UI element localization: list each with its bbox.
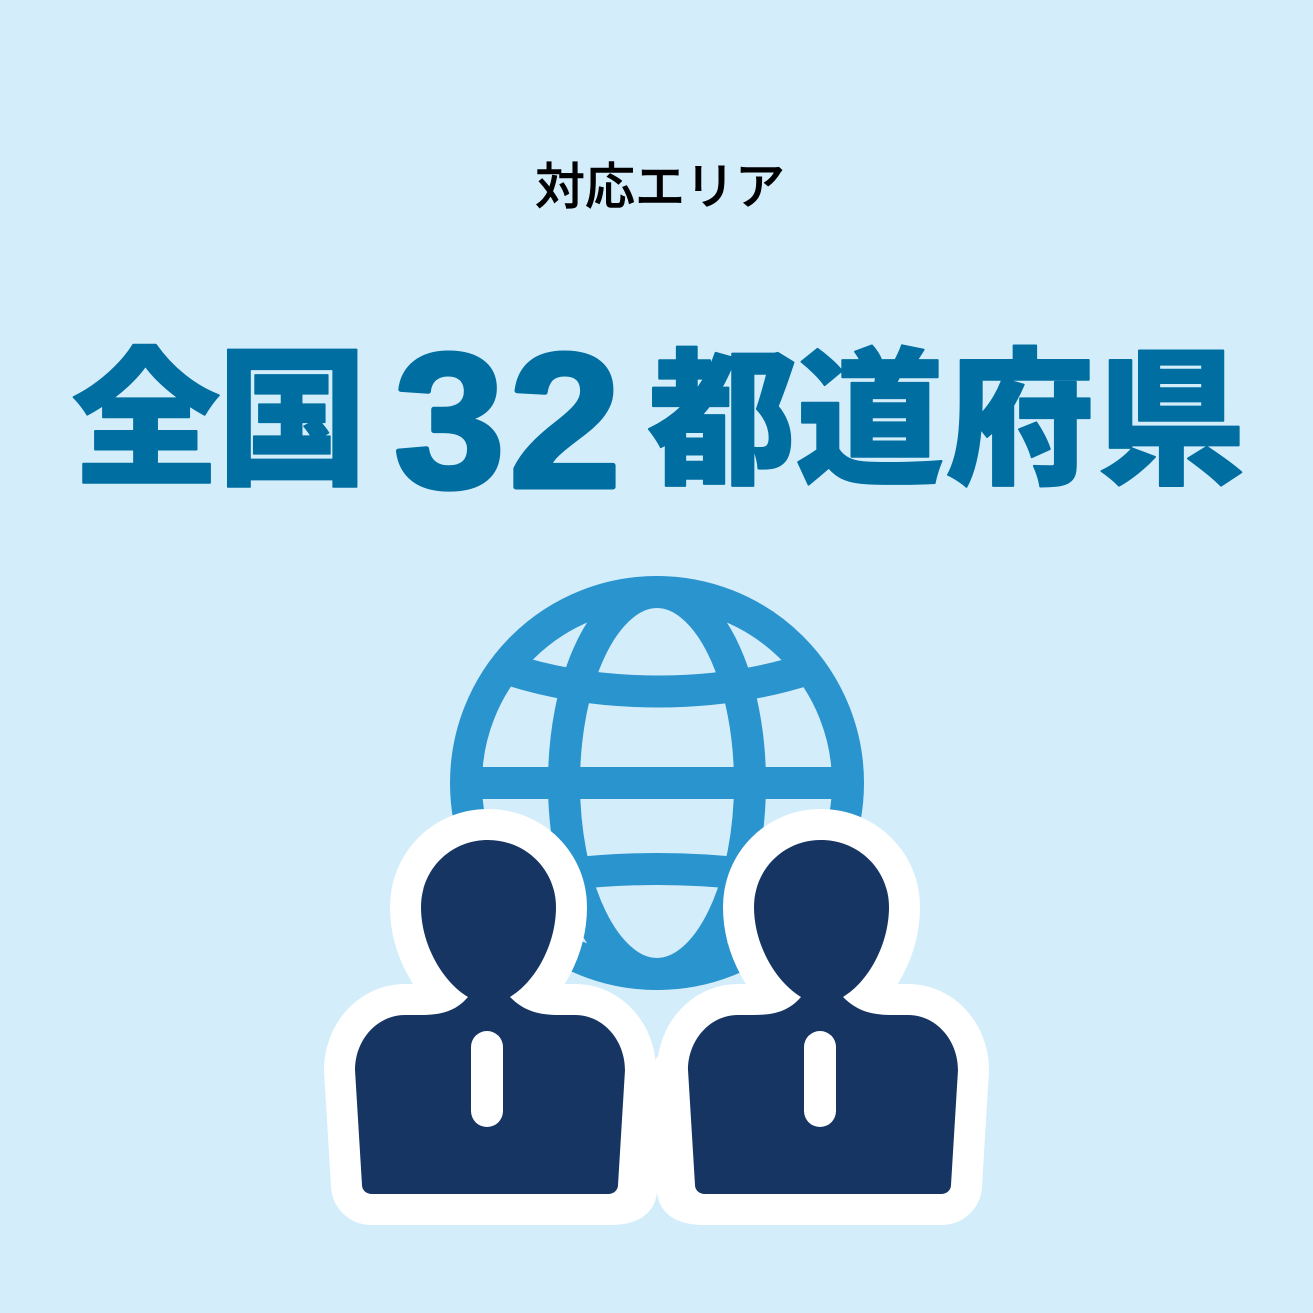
title: 全 (72, 339, 220, 504)
title: 県 (1097, 339, 1245, 504)
icon: person right (688, 840, 958, 1194)
icon: person left (355, 840, 625, 1194)
title: 都 (648, 339, 796, 504)
title: 道 (796, 339, 944, 504)
subtitle: 対応エリア (535, 147, 785, 219)
icon: globe (466, 592, 848, 974)
white outline bridge between the two people (610, 1056, 704, 1225)
title (72, 313, 1245, 528)
title: 2 (509, 313, 621, 528)
title: 国 (217, 336, 368, 505)
title: 3 (394, 314, 505, 528)
title: 府 (946, 339, 1094, 504)
